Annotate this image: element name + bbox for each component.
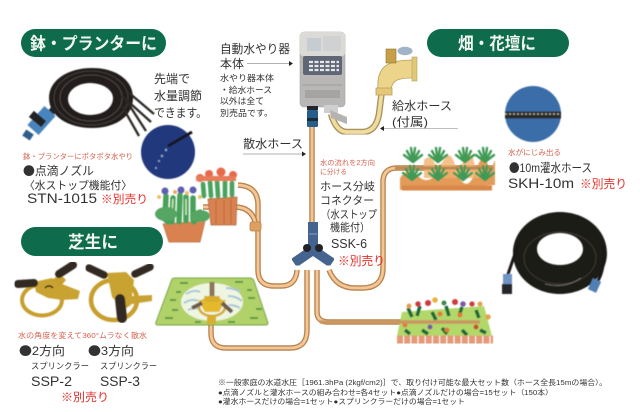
product text: soaker hose: ●10m灌水ホース	[509, 159, 592, 176]
product photo: drip nozzle coil	[26, 68, 154, 138]
label: ホース分岐コネクター: SSK-6	[331, 236, 367, 251]
faucet	[376, 47, 417, 95]
product text: drip nozzle: 〈水ストップ機能付〉	[24, 178, 132, 192]
heading pill: 芝生に: 芝生に	[68, 232, 118, 252]
label: 自動水やり器本体: 自動水やり器	[220, 42, 290, 56]
product text: sprinklers: スプリンクラー	[31, 361, 89, 371]
label: ホース分岐コネクター: 機能付）	[330, 220, 370, 234]
label: 給水ホース(付属): (付属)	[392, 115, 428, 129]
photo circle: weeping hose	[505, 86, 561, 142]
footnote: ●灌水ホースだけの場合=1セット●スプリンクラーだけの場合=1セット	[218, 397, 465, 406]
product text: sprinklers: SSP-3	[100, 374, 140, 389]
product photo: hose coil	[502, 212, 607, 294]
product text: sprinklers: ●3方向	[88, 342, 134, 359]
note: sold separately: 以外は全て	[220, 95, 264, 106]
product photo: 2-way sprinkler	[18, 265, 80, 316]
planter: purple flowers	[155, 186, 210, 242]
footnote: ●点滴ノズルと灌水ホースの組み合わせ=各4セット●点滴ノズルだけの場合=15セット（150本）	[218, 388, 553, 397]
product text: drip nozzle	[23, 152, 148, 206]
product text: sprinklers: SSP-2	[31, 374, 72, 389]
label: ホース分岐コネクター: コネクター	[320, 194, 374, 207]
flower bed	[320, 297, 493, 341]
label: 散水ホース	[243, 136, 306, 156]
label: ホース分岐コネクター: ホース分岐	[320, 180, 375, 193]
product text: sprinklers	[18, 331, 157, 404]
product text: drip nozzle: ※別売り	[101, 193, 148, 206]
heading pill: 畑・花壇に: 畑・花壇に	[458, 34, 536, 54]
product text: sprinklers: スプリンクラー	[100, 361, 157, 371]
label: ホース分岐コネクター: に分ける	[320, 167, 347, 176]
product text: sprinklers: ●2方向	[19, 342, 65, 359]
product photo: 3-way sprinkler	[89, 267, 152, 320]
footnote: ※一般家庭の水道水圧［1961.3hPa (2kgf/cm2)］で、取り付け可能な最大セット数（ホース全長15mの場合）。	[218, 378, 607, 387]
note: 先端で水量調節できます: できます。	[154, 106, 207, 120]
note: sold separately: 水やり器本体	[220, 72, 274, 83]
water timer unit	[300, 32, 347, 127]
product text: sprinklers: ※別売り	[61, 391, 109, 404]
heading pill: 芝生に	[21, 227, 163, 256]
note: 先端で水量調節できます	[154, 72, 207, 120]
heading pill: 鉢・プランターに	[21, 29, 166, 57]
label: 散水ホース: 散水ホース	[243, 136, 303, 151]
product text: sprinklers: 水の角度を変えて360°ムラなく散水	[18, 331, 148, 340]
Y hose connector	[294, 222, 332, 263]
label: ホース分岐コネクター: 水の流れを2方向	[320, 158, 375, 167]
note: sold separately: ・給水ホース	[220, 84, 272, 95]
note: 先端で水量調節できます: 先端で	[154, 72, 190, 86]
planter: orange flowers	[196, 168, 237, 225]
label: 給水ホース(付属)	[380, 99, 458, 131]
note: sold separately	[220, 72, 274, 118]
lawn with sprinkler	[156, 278, 268, 325]
label: ホース分岐コネクター: ※別売り	[338, 253, 385, 268]
product text: soaker hose	[508, 148, 627, 191]
label: 自動水やり器本体: 本体	[220, 57, 244, 71]
vegetable bed	[395, 148, 495, 190]
product text: soaker hose: ※別売り	[580, 177, 627, 191]
heading pill: 畑・花壇に	[427, 29, 569, 57]
label: ホース分岐コネクター: （水ストップ	[321, 208, 377, 221]
label: 自動水やり器本体	[220, 42, 293, 71]
supply hose from faucet	[331, 90, 382, 132]
product text: soaker hose: 水がにじみ出る	[508, 148, 561, 157]
product text: drip nozzle: STN-1015	[27, 190, 97, 206]
photo circle: nozzle dripping	[141, 125, 195, 179]
note: sold separately: 別売品です。	[220, 107, 273, 118]
heading pill: 鉢・プランターに: 鉢・プランターに	[30, 34, 157, 54]
hose network	[203, 125, 493, 348]
product text: drip nozzle: ●点滴ノズル	[23, 162, 94, 179]
product text: soaker hose: SKH-10m	[508, 176, 574, 191]
label: 給水ホース(付属): 給水ホース	[392, 99, 452, 113]
footnote	[218, 378, 607, 406]
note: 先端で水量調節できます: 水量調節	[154, 89, 202, 103]
product text: drip nozzle: 鉢・プランターにポタポタ水やり	[23, 152, 133, 161]
label: ホース分岐コネクター	[320, 158, 385, 268]
